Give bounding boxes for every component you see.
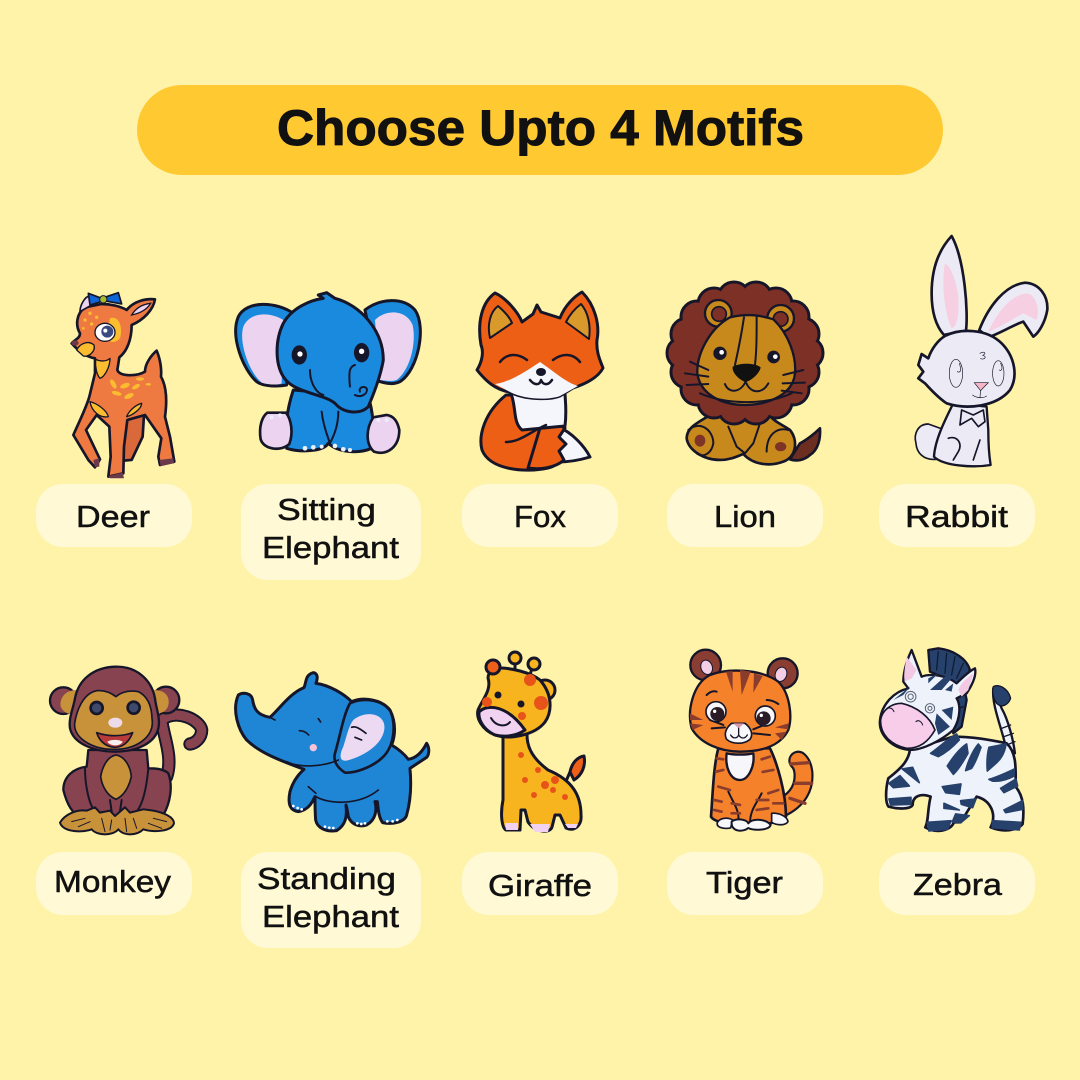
icon: lion	[667, 282, 823, 464]
icon: rabbit	[915, 236, 1047, 466]
icon: sitting elephant	[236, 293, 420, 453]
label: monkey: Monkey	[54, 864, 172, 899]
label: zebra: Zebra	[913, 867, 1003, 902]
label: sitting elephant: Sitting	[277, 492, 376, 527]
icon: zebra	[880, 648, 1023, 831]
title banner: Choose Upto 4 Motifs	[277, 100, 804, 156]
label: standing elephant	[241, 852, 421, 948]
label: lion	[667, 484, 823, 547]
label: sitting elephant	[241, 484, 421, 580]
icon: giraffe	[478, 652, 585, 832]
label: zebra	[879, 852, 1035, 915]
label: standing elephant: Elephant	[262, 899, 399, 934]
title banner	[137, 85, 943, 175]
label: fox: Fox	[514, 499, 566, 534]
icon: fox	[477, 292, 603, 470]
label: giraffe	[462, 852, 618, 915]
icon: standing elephant	[236, 673, 429, 831]
label: rabbit	[879, 484, 1035, 547]
label: standing elephant: Standing	[257, 861, 396, 896]
label: lion: Lion	[714, 499, 776, 534]
label: giraffe: Giraffe	[488, 868, 592, 903]
icon: monkey	[50, 667, 202, 834]
label: sitting elephant: Elephant	[262, 530, 399, 565]
label: tiger	[667, 852, 823, 915]
label: deer	[36, 484, 192, 547]
icon: deer	[71, 293, 174, 478]
label: tiger: Tiger	[706, 865, 783, 900]
label: fox	[462, 484, 618, 547]
label: deer: Deer	[76, 499, 150, 534]
label: monkey	[36, 852, 192, 915]
icon: tiger	[690, 650, 812, 831]
label: rabbit: Rabbit	[905, 499, 1008, 534]
